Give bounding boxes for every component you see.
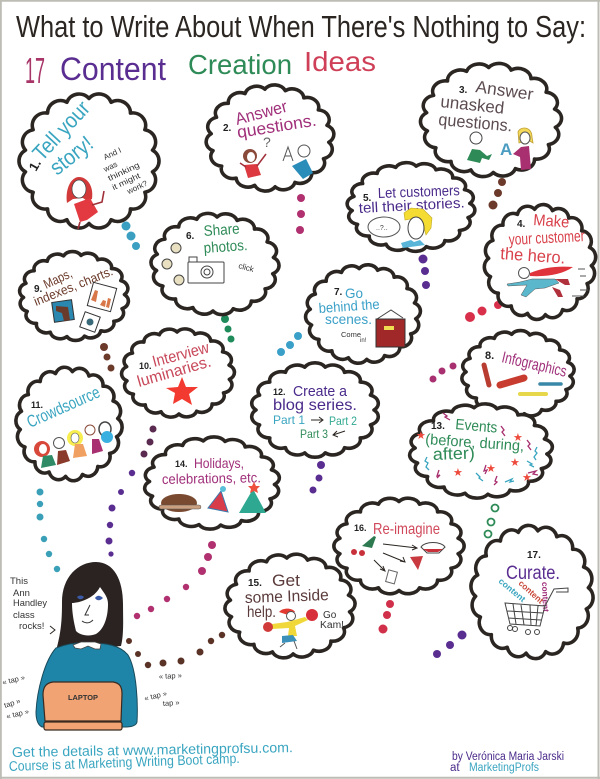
number 7: 7.	[334, 287, 343, 298]
icon: camera and smileys	[162, 243, 224, 285]
heading: interview luminaries: Interview	[151, 339, 211, 371]
number 3: 3.	[459, 85, 468, 96]
number 4: 4.	[517, 219, 526, 230]
panel: cloud 12 create a blog series	[234, 350, 396, 470]
panel: cloud 17 curate	[457, 510, 600, 674]
note: this Ann Handley class rocks: Ann	[13, 588, 30, 599]
panel: cloud 4 make your customer the hero	[481, 201, 599, 323]
connector dots: cloud 2	[296, 194, 305, 234]
number 1: 1.	[26, 157, 44, 174]
number 2: 2.	[223, 123, 232, 134]
collar	[73, 642, 101, 649]
heading: crowdsource: Crowdsource	[24, 383, 103, 432]
heading: let customers tell their stories: Let customers	[378, 183, 460, 202]
connector dots: cloud 11	[36, 488, 60, 572]
heading: answer unasked questions	[438, 77, 535, 135]
panel: cloud 14 holidays celebrations	[124, 423, 300, 543]
panel: cloud 7 go behind the scenes	[300, 260, 426, 368]
heading: holidays celebrations	[162, 455, 261, 487]
number 17: 17.	[527, 550, 541, 561]
tap labels left	[1, 673, 30, 721]
connector dots: cloud 9	[100, 343, 114, 372]
panel: cloud 11 crowdsource	[5, 355, 133, 493]
heading: make your customer the hero	[500, 212, 586, 268]
heading: answer questions: Answer	[233, 97, 290, 129]
number 6: 6.	[186, 231, 195, 242]
number 13: 13.	[431, 421, 445, 432]
speech text	[97, 141, 149, 202]
subtitle: Creation	[188, 49, 292, 80]
speech text: thinking	[106, 160, 141, 183]
heading: tell your story: Tell your	[27, 96, 95, 165]
icon: red star	[166, 377, 198, 405]
panel: cloud 16 re-imagine	[324, 490, 474, 602]
confetti stars: ★	[522, 472, 532, 484]
laptop	[43, 682, 122, 730]
heading: holidays celebrations: Holidays,	[194, 455, 244, 471]
panel: cloud 15 get some inside help	[218, 548, 362, 664]
icon: turkey hat and tree	[159, 482, 266, 513]
falling content words: content	[540, 582, 551, 612]
confetti stars: ★	[513, 432, 523, 444]
panel: cloud 3 answer unasked questions	[412, 56, 570, 184]
panel: cloud 13 events	[387, 389, 575, 513]
heading: events before during after: (before, during,	[425, 431, 525, 455]
heading: answer questions: questions.	[236, 111, 318, 142]
connector dots: cloud 13	[484, 504, 498, 538]
icon: five people	[34, 422, 113, 468]
come in label: Come	[341, 330, 361, 339]
number 5: 5.	[363, 193, 372, 204]
tap labels right	[143, 671, 182, 708]
speech text: work?	[125, 179, 149, 196]
heading: infographics: Infographics	[500, 349, 568, 381]
heading: get some inside help: help.	[247, 604, 276, 621]
icon: cherries arrows pie ice cream glass	[351, 536, 445, 584]
subtitle: 17	[25, 50, 45, 91]
go team label: Kam!	[320, 620, 344, 631]
heading: go behind the scenes: scenes.	[325, 311, 372, 327]
icon: speech balloon and blond customer	[368, 208, 432, 248]
heading: get some inside help	[245, 571, 329, 621]
heading: make your customer the hero: the hero.	[500, 244, 566, 268]
heading: answer unasked questions: questions.	[438, 110, 513, 135]
tap labels right: tap »	[163, 698, 180, 708]
heading: go behind the scenes: behind the	[318, 296, 380, 316]
parts diagram: Part 1	[273, 413, 305, 427]
connector dots: cloud 12	[310, 461, 325, 494]
connector dots: cloud 14	[134, 541, 216, 619]
number 10: 10.	[139, 361, 152, 371]
footer note: course details: Course is at Marketing Writing Boot camp.	[9, 750, 240, 774]
icon: two people and question mark: ?	[263, 134, 271, 150]
icon: shopping cart	[505, 588, 568, 634]
credit: author byline: MarketingProfs	[469, 762, 539, 774]
connector dots: cloud 5	[418, 254, 430, 289]
icon: door	[376, 310, 405, 347]
note: this Ann Handley class rocks: This	[10, 576, 28, 587]
number 9: 9.	[34, 284, 43, 295]
footer note: course details	[9, 739, 293, 774]
connector dots: cloud 3	[488, 178, 506, 210]
person: Ann Handley class attendee at laptop	[36, 562, 137, 730]
click label: click	[237, 261, 256, 274]
note: this Ann Handley class rocks: rocks!	[19, 621, 44, 632]
note: this Ann Handley class rocks: class	[13, 610, 35, 621]
footer note: course details: Get the details at www.marketingprofsu.com.	[12, 739, 293, 760]
icon: boy and girl with letter A	[467, 128, 533, 170]
panel: cloud 1 tell your story	[9, 82, 169, 240]
heading: share photos: Share	[203, 221, 240, 240]
heading: go behind the scenes: Go	[345, 285, 363, 301]
parts diagram: Part 3	[300, 427, 328, 441]
heading: let customers tell their stories	[358, 183, 465, 217]
heading: share photos: photos.	[203, 237, 248, 257]
go team label: Go	[323, 610, 337, 621]
panel: cloud 5 let customers tell their stories	[333, 153, 489, 261]
icon: cheerleader with pompoms	[263, 609, 318, 649]
note: this Ann Handley class rocks: Handley	[13, 598, 47, 609]
heading: maps indexes charts: indexes, charts.	[32, 263, 115, 309]
speech text: it might	[111, 171, 142, 192]
connector dots: cloud 4	[465, 301, 502, 322]
come in label	[341, 330, 367, 344]
panel: cloud 9 maps indexes charts	[6, 240, 142, 352]
connector dots: cloud 7	[277, 332, 302, 356]
falling content words: content	[497, 576, 528, 604]
heading: answer unasked questions: unasked	[440, 92, 505, 118]
icon: girl in red	[67, 177, 104, 229]
heading: get some inside help: Get	[272, 571, 300, 590]
eyes nose and mouth	[77, 596, 103, 623]
connector dots: cloud 10	[106, 426, 156, 557]
hair	[57, 562, 123, 649]
tap labels left: tap »	[3, 696, 21, 710]
heading: events before during after: Events	[455, 416, 498, 437]
heading: get some inside help: some Inside	[245, 587, 329, 607]
heading: make your customer the hero: Make	[533, 212, 570, 232]
confetti squiggles	[425, 413, 538, 485]
come in label: in!	[360, 338, 367, 344]
speech text: And I	[102, 146, 123, 162]
number 12: 12.	[273, 387, 286, 397]
parts diagram: Part 2	[329, 414, 357, 428]
connector dots: cloud 15	[126, 632, 225, 668]
confetti stars	[416, 430, 532, 484]
heading: share photos	[203, 221, 248, 257]
speech text: was	[101, 160, 119, 174]
heading: go behind the scenes	[318, 285, 380, 327]
confetti stars: ★	[416, 430, 426, 442]
number 16: 16.	[354, 523, 367, 533]
connector dots: cloud 6	[221, 315, 234, 342]
icon: map chart and square	[52, 282, 117, 332]
number 11: 11.	[31, 400, 43, 410]
title	[16, 9, 586, 91]
sweater	[36, 643, 137, 727]
icon: flying superhero	[507, 267, 588, 297]
confetti stars: ★	[453, 467, 463, 479]
heading: curate: Curate.	[506, 563, 560, 584]
number 14: 14.	[175, 459, 188, 469]
connector dots: cloud 8	[430, 362, 456, 382]
heading: events before during after: after)	[432, 444, 475, 464]
tap labels right: « tap »	[143, 689, 168, 703]
panel: cloud 2 answer questions	[201, 80, 339, 196]
heading: create a blog series: Create a	[293, 383, 348, 400]
heading: answer questions	[233, 97, 318, 142]
tap labels left: « tap »	[5, 707, 30, 721]
panel: cloud 10 interview luminaries	[114, 322, 242, 424]
connector dots: cloud 16	[378, 600, 394, 634]
number 15: 15.	[248, 578, 262, 589]
subtitle: Content	[60, 51, 166, 87]
number 8: 8.	[485, 350, 494, 362]
icon: boy and girl with letter A: A	[500, 140, 512, 159]
connector dots: cloud 1	[122, 222, 140, 250]
credit: author byline: by Verónica Maria Jarski	[452, 751, 564, 763]
heading: holidays celebrations: celebrations, etc.	[162, 469, 261, 487]
falling content words: content	[517, 578, 546, 606]
confetti stars: ★	[486, 463, 496, 475]
heading: tell your story: story!	[45, 131, 98, 180]
confetti stars: ★	[510, 457, 520, 469]
heading: events before during after	[425, 416, 525, 464]
heading: maps indexes charts: Maps,	[41, 265, 74, 292]
credit: author byline: at	[450, 762, 460, 774]
panel: cloud 8 infographics	[459, 328, 577, 420]
heading: answer unasked questions: Answer	[474, 77, 535, 104]
subtitle	[25, 46, 376, 91]
laptop: LAPTOP	[68, 695, 98, 702]
icon: pencils	[484, 365, 561, 394]
icon: speech balloon and blond customer: ..?..	[376, 225, 388, 232]
parts diagram	[273, 413, 357, 441]
heading: let customers tell their stories: tell their stories.	[358, 195, 465, 217]
tap labels right: « tap »	[159, 671, 182, 681]
face	[72, 587, 108, 635]
subtitle: Ideas	[304, 46, 376, 77]
heading: interview luminaries: luminaries.	[135, 354, 213, 391]
connector dots: cloud 17	[433, 630, 466, 658]
credit: author byline	[450, 751, 564, 774]
go team label	[320, 610, 344, 631]
tap labels left: « tap »	[1, 673, 26, 687]
note: this Ann Handley class rocks	[10, 576, 55, 634]
heading: re-imagine: Re-imagine	[373, 521, 440, 538]
heading: create a blog series	[273, 383, 357, 414]
panel: cloud 6 share photos	[140, 204, 290, 324]
heading: create a blog series: blog series.	[273, 397, 357, 414]
falling content words	[497, 576, 551, 612]
